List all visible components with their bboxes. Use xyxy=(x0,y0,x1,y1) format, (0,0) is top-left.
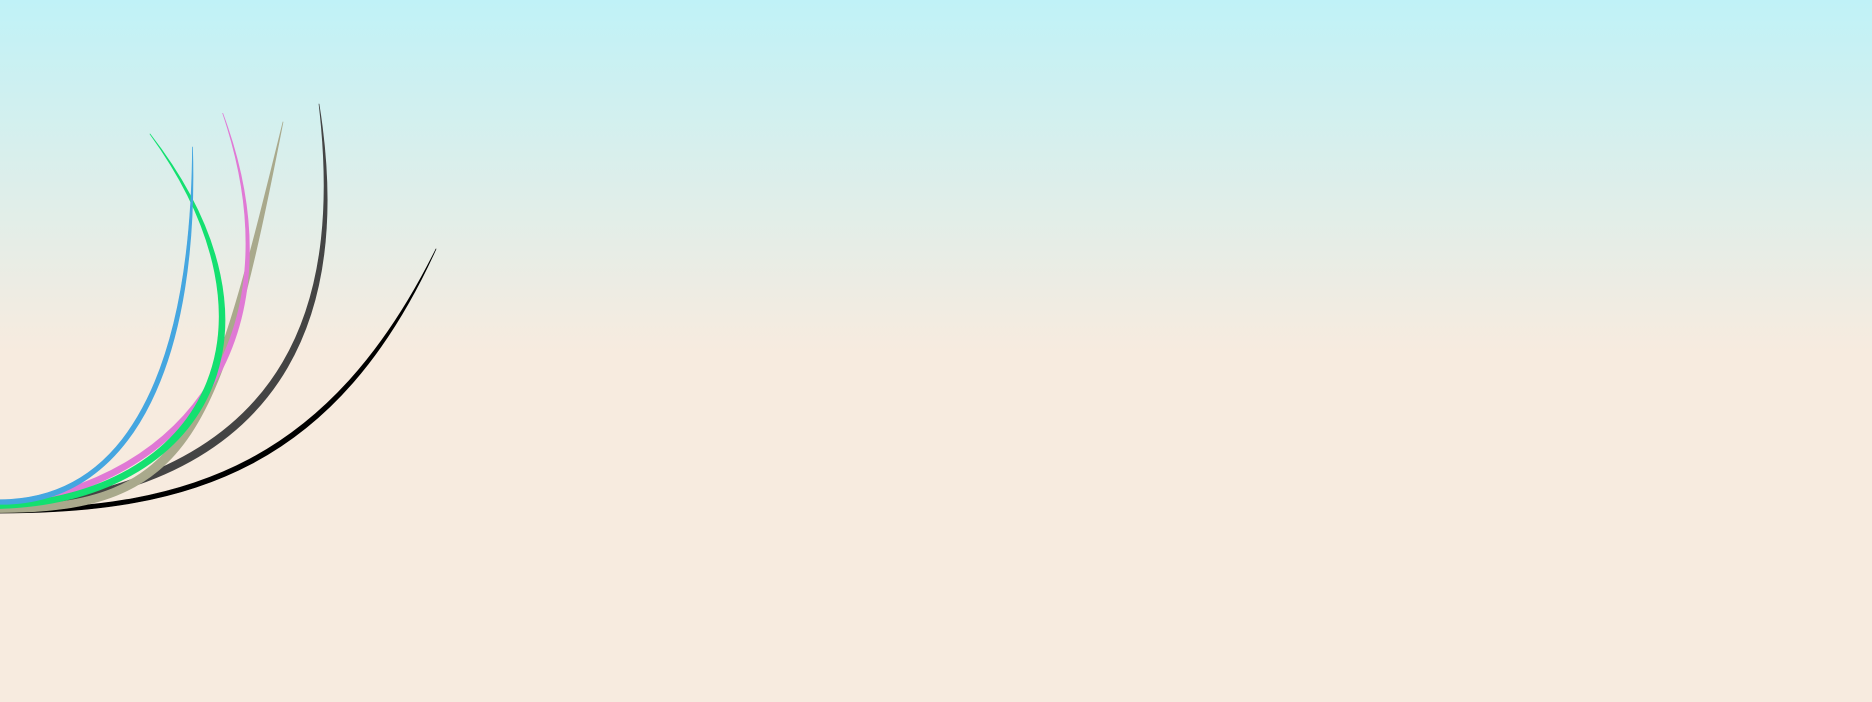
curve: dark grey xyxy=(0,104,327,510)
curve: black xyxy=(0,249,436,513)
curve: green xyxy=(0,134,225,508)
curve: blue xyxy=(0,147,193,504)
curve: khaki xyxy=(0,122,283,513)
curve: pink xyxy=(0,113,249,508)
